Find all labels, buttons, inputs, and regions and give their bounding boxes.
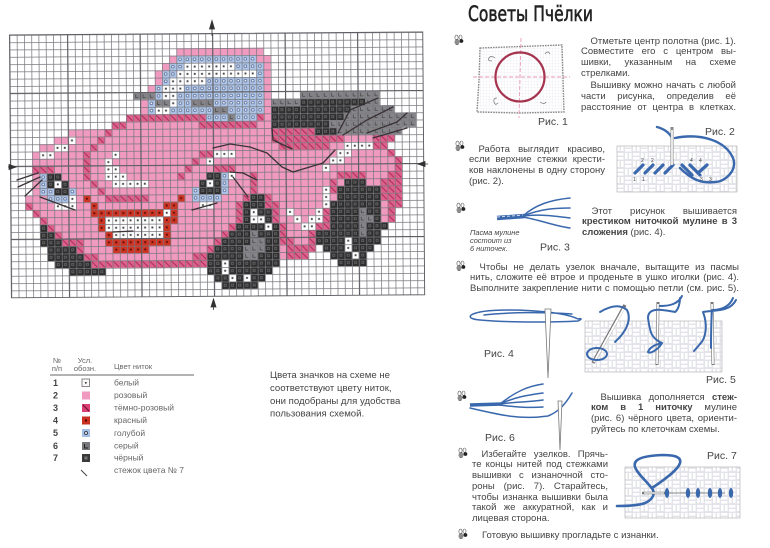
text: back stitch: (рис. 6) чёрного цвета, ориенти- bbox=[591, 413, 737, 424]
note about symbol colours: Цвета значков на схеме не bbox=[270, 370, 390, 381]
legend rows: серый bbox=[114, 440, 139, 450]
legend rows: 3 bbox=[53, 403, 58, 413]
back-stitch lines on the car bbox=[17, 98, 407, 232]
text: stitched with three strands bbox=[582, 206, 737, 238]
figure 2: cross stitch and needle: 3 bbox=[709, 177, 712, 183]
text: mark the centre bbox=[581, 36, 736, 113]
text: mark the centre: части рисунка, определив её bbox=[581, 91, 736, 102]
caption: Рис. 3: Рис. 3 bbox=[540, 242, 570, 254]
icon: bee 2 bbox=[456, 141, 464, 151]
red stitches bbox=[83, 198, 185, 250]
grey stitches bbox=[133, 94, 417, 257]
figure 2: cross stitch and needle: 3 bbox=[700, 177, 703, 183]
text: stitches in one direction: ков наклонены в одну сторону bbox=[469, 165, 605, 176]
text: avoid knots: вышивки с изнаночной сто- bbox=[472, 470, 608, 481]
legend header: № bbox=[53, 356, 61, 365]
legend rows: голубой bbox=[114, 428, 145, 438]
pink stitches bbox=[24, 50, 403, 258]
legend header bbox=[52, 356, 153, 373]
legend rows: розовый bbox=[114, 390, 148, 400]
legend rows: 4 bbox=[53, 416, 58, 426]
figure 2: cross stitch and needle: 1 bbox=[642, 177, 645, 183]
text: stitched with three strands: крестиком ниточкой мулине в 3 bbox=[582, 216, 737, 227]
white stitches bbox=[39, 65, 374, 279]
legend rows: стежок цвета № 7 bbox=[114, 465, 184, 475]
text: stitches in one direction bbox=[469, 144, 605, 187]
text: mark the centre: Совместите его с центром вы- bbox=[581, 46, 736, 57]
text: back stitch: Вышивка дополняется стеж- bbox=[600, 392, 737, 402]
text: avoid a knot at the start: нить, сложите её втрое и проденьте в ушко иголки (рис. 4). bbox=[470, 272, 739, 283]
black stitches bbox=[39, 102, 388, 287]
icon: bee 6 bbox=[459, 448, 467, 458]
legend rows: красный bbox=[114, 415, 147, 425]
icon: bee 7 bbox=[459, 529, 467, 539]
text: avoid knots: чтобы изнанка вышивки была bbox=[472, 492, 608, 503]
figure 7: back stitch on weave bbox=[617, 455, 740, 518]
note about symbol colours: соответствуют цвету ниток, bbox=[270, 383, 392, 394]
text: avoid knots: роны (рис. 7). Старайтесь, bbox=[472, 481, 608, 492]
figure 1: canvas in hoop bbox=[473, 38, 570, 118]
icon: bee 1 bbox=[455, 35, 463, 45]
text: iron finished work: Готовую вышивку прогладьте с изнанки. bbox=[482, 530, 659, 540]
text: avoid knots: Избегайте узелков. Прячь- bbox=[482, 448, 608, 460]
text: avoid knots: лицевая сторона. bbox=[472, 513, 550, 524]
legend header: Усл. bbox=[78, 356, 92, 365]
colour legend table bbox=[50, 356, 194, 476]
note about symbol colours bbox=[270, 370, 401, 420]
legend rows: чёрный bbox=[114, 452, 144, 462]
cross-stitch chart: pink car bbox=[8, 20, 428, 310]
legend header: п/п bbox=[52, 364, 62, 373]
figure 3: skein of floss bbox=[497, 198, 570, 228]
dark pink stitches bbox=[25, 116, 403, 265]
legend rows: 7 bbox=[53, 453, 58, 463]
legend rows: 6 bbox=[53, 441, 58, 451]
text: avoid a knot at the start: Выполните закрепление нити с помощью петли (см. рис. 5). bbox=[470, 283, 739, 294]
text: mark the centre: расстояние от центра в клетках. bbox=[581, 102, 736, 113]
legend rows bbox=[53, 378, 184, 476]
figure 2: cross stitch and needle bbox=[617, 127, 737, 192]
caption: Рис. 2: Рис. 2 bbox=[705, 126, 735, 138]
figure 2: cross stitch and needle: 4 bbox=[699, 158, 702, 164]
text: back stitch: руйтесь по клеточкам схемы. bbox=[591, 424, 720, 435]
centre arrows bbox=[8, 20, 428, 310]
text: stitches in one direction: если верхние стежки кpести- bbox=[469, 154, 605, 165]
legend rows: 5 bbox=[53, 428, 58, 438]
caption: Рис. 6: Рис. 6 bbox=[485, 432, 515, 444]
legend rows: 1 bbox=[53, 378, 58, 388]
note about symbol colours: пользования схемой. bbox=[270, 408, 364, 420]
text: avoid a knot at the start bbox=[470, 262, 739, 294]
text: avoid a knot at the start: Чтобы не делать узелок вначале, вытащите из пасмы bbox=[480, 262, 739, 272]
legend rows: 2 bbox=[53, 390, 58, 400]
text: mark the centre: стрелками. bbox=[581, 68, 630, 79]
text: stitched with three strands: Этот рисунок вышивается bbox=[592, 206, 737, 216]
caption: skein note: состоит из bbox=[470, 236, 512, 245]
legend header: обозн. bbox=[74, 364, 96, 373]
figure 6: one strand through needle bbox=[470, 384, 572, 450]
text: mark the centre: Отметьте центр полотна (рис. 1). bbox=[590, 36, 736, 46]
icon: bee 4 bbox=[457, 261, 465, 271]
text: back stitch: ком в 1 ниточку мулине bbox=[591, 402, 737, 413]
legend rows: тёмно-розовый bbox=[114, 402, 174, 412]
caption: Рис. 1: Рис. 1 bbox=[538, 116, 568, 128]
caption: Рис. 5: Рис. 5 bbox=[706, 374, 736, 386]
text: stitches in one direction: (рис. 2). bbox=[469, 176, 504, 187]
text: avoid knots bbox=[472, 448, 608, 524]
text: stitches in one direction: Работа выглядит красиво, bbox=[478, 144, 605, 154]
note about symbol colours: они подобраны для удобства bbox=[270, 396, 401, 407]
legend header: Цвет ниток bbox=[114, 362, 153, 371]
caption: skein note bbox=[470, 228, 519, 253]
title: Советы Пчёлки bbox=[468, 2, 593, 26]
caption: skein note: Пасма мулине bbox=[470, 228, 519, 237]
caption: Рис. 7: Рис. 7 bbox=[707, 450, 737, 462]
figure 2: cross stitch and needle: 2 bbox=[651, 158, 654, 164]
figure 2: cross stitch and needle: 2 bbox=[641, 158, 644, 164]
blue stitches bbox=[39, 59, 264, 199]
icon: bee 5 bbox=[458, 391, 466, 401]
text: stitched with three strands: сложения (рис. 4). bbox=[582, 227, 665, 238]
caption: skein note: 6 ниточек. bbox=[470, 244, 508, 253]
figure 2: cross stitch and needle: 4 bbox=[690, 158, 693, 164]
figure 2: cross stitch and needle: 1 bbox=[633, 177, 636, 183]
text: avoid knots: те концы нитей под стежками bbox=[472, 459, 608, 470]
figure 4: needle with looped thread bbox=[470, 309, 581, 378]
caption: Рис. 4: Рис. 4 bbox=[484, 348, 514, 360]
figure 5: starting loop on weave bbox=[585, 296, 736, 372]
text: back stitch bbox=[591, 392, 737, 435]
text: mark the centre: Вышивку можно начать с любой bbox=[590, 80, 736, 91]
icon: bee 3 bbox=[457, 203, 465, 213]
legend rows: белый bbox=[114, 378, 139, 388]
text: mark the centre: шивки, указанным на схеме bbox=[581, 57, 736, 68]
text: avoid knots: такой же аккуратной, как и bbox=[472, 502, 608, 513]
